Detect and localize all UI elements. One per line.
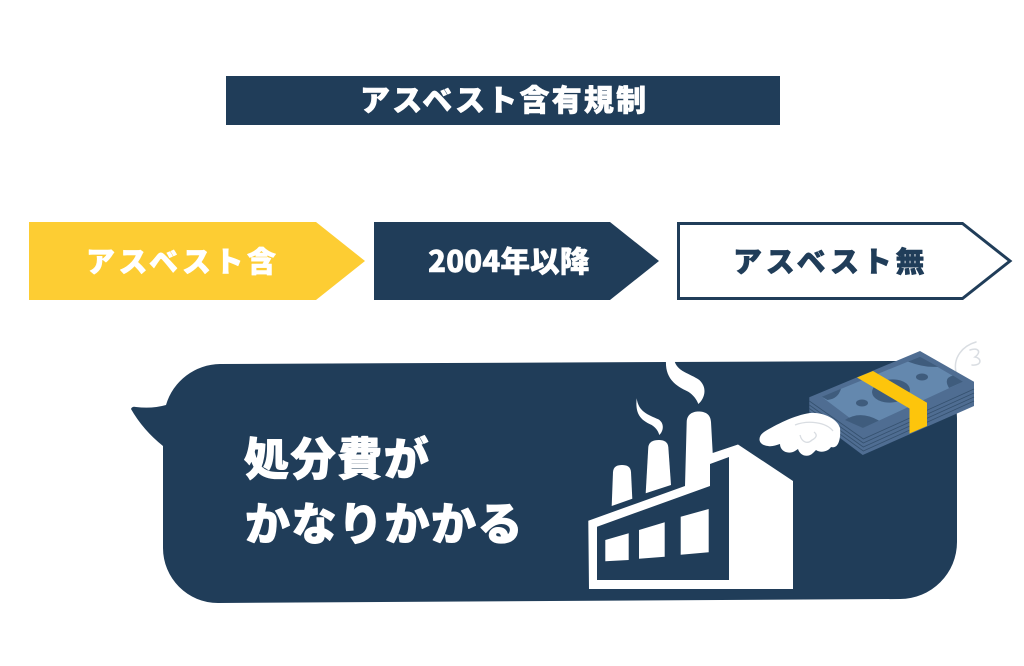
bubble text: 処分費が bbox=[244, 423, 430, 488]
arrow: from 2004 onward: 2004年以降 bbox=[428, 238, 590, 281]
bubble text: かなりかかる bbox=[245, 488, 524, 553]
icon: back wing bbox=[955, 342, 980, 372]
bubble text bbox=[244, 423, 524, 553]
icon: factory bbox=[588, 360, 793, 589]
arrow: asbestos free bbox=[678, 224, 1010, 298]
arrow: asbestos contained: アスベスト含 bbox=[86, 239, 280, 281]
arrow: asbestos free: アスベスト無 bbox=[733, 239, 928, 281]
title bar bbox=[226, 76, 780, 125]
arrow: asbestos contained bbox=[29, 222, 365, 300]
icon: front wing bbox=[759, 413, 840, 456]
icon: flying money bbox=[809, 351, 974, 455]
title bar: アスベスト含有規制 bbox=[360, 76, 648, 120]
arrow: from 2004 onward bbox=[374, 222, 659, 300]
speech bubble bbox=[131, 361, 957, 603]
